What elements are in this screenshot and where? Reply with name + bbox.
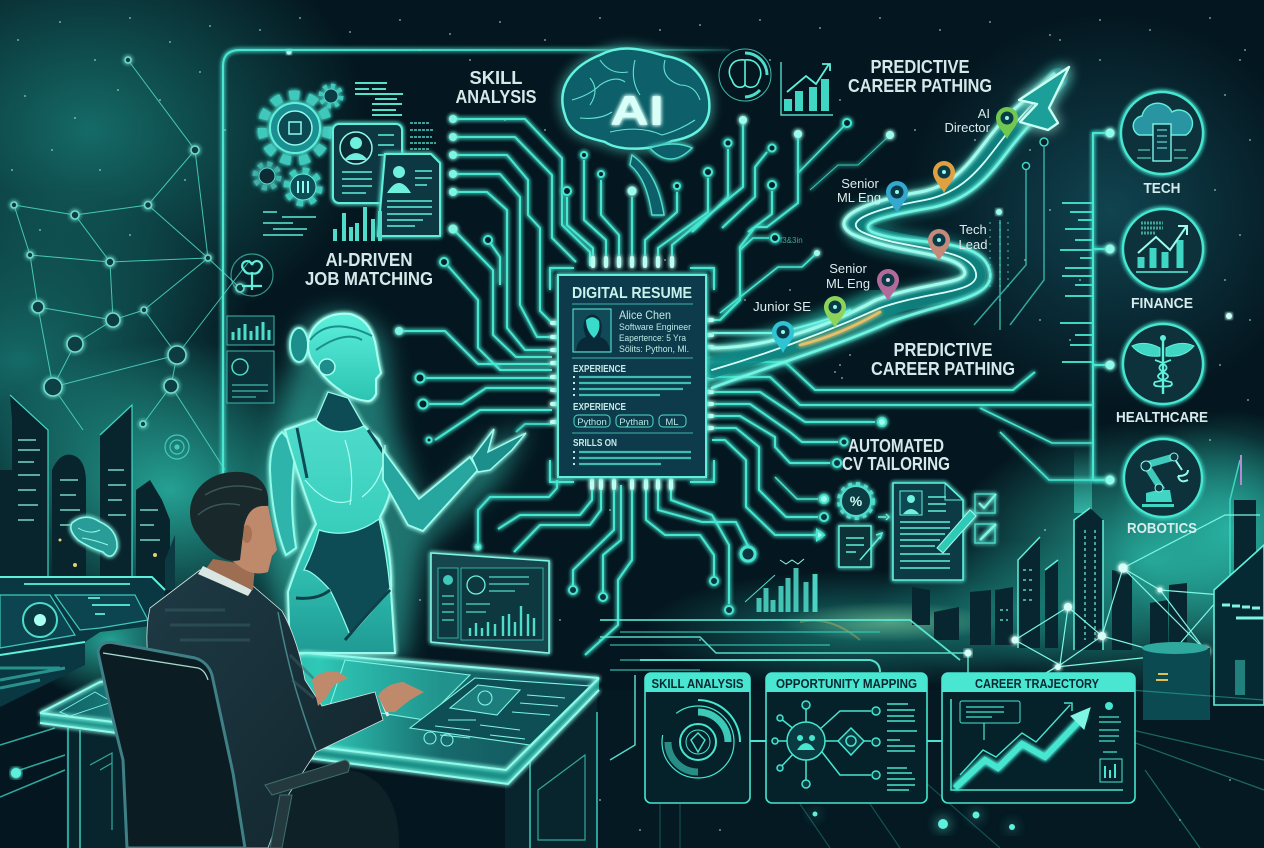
profile photo bbox=[573, 309, 611, 352]
career pins and labels: ML Eng bbox=[837, 190, 881, 205]
woman hologram bbox=[270, 314, 526, 653]
network constellation, left bbox=[11, 57, 250, 470]
skill analysis heading: SKILL bbox=[470, 68, 523, 88]
career pins and labels: ML Eng bbox=[826, 276, 870, 291]
profile text: Software Engineer bbox=[619, 322, 691, 333]
rooftop building, right bbox=[1142, 545, 1264, 720]
digital resume panel bbox=[550, 268, 714, 482]
woman glow halo bbox=[262, 312, 530, 660]
small left panels: bar chart and document bbox=[227, 316, 274, 403]
skill pills: Python bbox=[577, 417, 607, 428]
skill analysis heading: ANALYSIS bbox=[456, 87, 536, 107]
brain with AI label bbox=[562, 49, 709, 215]
career pins and labels: Junior SE bbox=[753, 299, 811, 314]
small garbled readout: f3&3in bbox=[780, 236, 803, 245]
predictive career pathing heading, lower bbox=[871, 340, 1015, 379]
floor grid lines bbox=[600, 620, 1264, 848]
panel: skill analysis bbox=[645, 673, 750, 803]
panel connectors bbox=[750, 740, 942, 742]
hologram arm, left side bbox=[270, 432, 296, 555]
predictive career pathing heading, top bbox=[848, 57, 992, 96]
radial gauge bbox=[662, 700, 740, 778]
cv tailoring icons bbox=[839, 483, 996, 580]
predictive career pathing heading, lower: PREDICTIVE bbox=[894, 340, 992, 360]
caduceus icon bbox=[1132, 335, 1194, 394]
hologram neck bbox=[316, 392, 364, 432]
man seated at desk bbox=[98, 472, 424, 848]
circuit traces: brain to resume top bbox=[563, 116, 894, 320]
digital resume panel: SRILLS ON bbox=[573, 438, 617, 449]
icon: hologram brain, left bbox=[71, 517, 117, 556]
automated cv tailoring heading bbox=[842, 436, 950, 474]
profile text bbox=[619, 308, 691, 355]
job matching heading: AI-DRIVEN bbox=[326, 250, 412, 270]
jacket bbox=[147, 570, 383, 848]
man hair bbox=[190, 472, 268, 561]
career pins and labels: Senior bbox=[829, 261, 867, 276]
career pins and labels: AI bbox=[978, 106, 990, 121]
hologram right arm and hand bbox=[383, 450, 478, 531]
city skyline, left bbox=[0, 395, 180, 600]
target icon bbox=[165, 435, 189, 459]
bottom glowing dots bbox=[812, 812, 1015, 830]
industry: tech bbox=[1121, 92, 1203, 197]
left console bbox=[0, 577, 165, 797]
profile text: Sölits: Python, Ml. bbox=[619, 344, 689, 355]
profile text: Alice Chen bbox=[619, 308, 671, 322]
panel: career trajectory bbox=[942, 673, 1135, 803]
chart icon bbox=[1136, 223, 1188, 272]
predictive career pathing heading, top: PREDICTIVE bbox=[870, 57, 970, 77]
resume document icons bbox=[333, 124, 440, 236]
skill pills bbox=[574, 415, 686, 428]
industry: tech: TECH bbox=[1144, 180, 1180, 197]
automated cv tailoring heading: AUTOMATED bbox=[848, 436, 944, 456]
career pins and labels: Tech bbox=[959, 222, 987, 237]
cv tailoring icons: % bbox=[850, 493, 863, 509]
cloud and server icon bbox=[1133, 103, 1192, 161]
industry: finance: FINANCE bbox=[1131, 295, 1193, 312]
man neck and collar bbox=[205, 559, 255, 590]
career path ribbon and arrow bbox=[700, 67, 1069, 388]
career pins and labels: Senior bbox=[841, 176, 879, 191]
code readouts and small bars bbox=[263, 83, 436, 241]
robot arm icon bbox=[1141, 453, 1188, 507]
resume title: DIGITAL RESUME bbox=[572, 285, 692, 302]
circuit traces: resume right and lower right bbox=[646, 320, 1104, 614]
small data ticks right of path bbox=[974, 138, 1092, 362]
small bar chart near city bbox=[745, 559, 815, 612]
top right icons: brain badge and chart bbox=[719, 49, 833, 115]
job matching heading bbox=[305, 250, 433, 289]
floor node bbox=[964, 650, 972, 656]
man hands bbox=[312, 672, 348, 706]
hologram torso and skirt bbox=[285, 419, 395, 653]
network over city bbox=[1000, 515, 1260, 700]
man face bbox=[232, 505, 277, 574]
predictive career pathing heading, top: CAREER PATHING bbox=[848, 76, 992, 96]
desk bbox=[40, 653, 599, 848]
AI label: AI bbox=[610, 87, 664, 134]
circuit traces: resume bottom bbox=[476, 480, 671, 655]
skill pills: ML bbox=[665, 417, 679, 428]
night city, lower right bbox=[800, 447, 1256, 655]
panel: skill analysis: SKILL ANALYSIS bbox=[652, 677, 744, 691]
career pins and labels: Director bbox=[944, 120, 991, 135]
panel: opportunity mapping bbox=[766, 673, 927, 803]
icon: tree node in circle bbox=[231, 254, 273, 296]
panel: career trajectory: CAREER TRAJECTORY bbox=[975, 677, 1100, 691]
circuit traces: upper left and left side bbox=[395, 115, 590, 442]
industry: robotics bbox=[1124, 439, 1202, 537]
job matching heading: JOB MATCHING bbox=[305, 269, 433, 289]
industry: robotics: ROBOTICS bbox=[1127, 520, 1197, 537]
digital resume panel: EXPERIENCE bbox=[573, 364, 626, 375]
industry: healthcare bbox=[1116, 324, 1208, 426]
industry: healthcare: HEALTHCARE bbox=[1116, 409, 1208, 426]
industry connector line bbox=[1093, 128, 1114, 484]
hologram head bbox=[308, 314, 381, 401]
opportunity network bbox=[772, 701, 880, 788]
waist corset bbox=[304, 519, 390, 635]
panel: opportunity mapping: OPPORTUNITY MAPPING bbox=[776, 677, 917, 691]
skill pills: Pythan bbox=[619, 417, 649, 428]
gears icon group bbox=[255, 86, 341, 203]
digital resume panel: EXPERIENCE bbox=[573, 402, 626, 413]
desk screens bbox=[60, 660, 590, 746]
mini dashboard monitor bbox=[431, 553, 549, 653]
shoulder bands bbox=[297, 428, 385, 478]
career pins and labels bbox=[753, 106, 1018, 353]
predictive career pathing heading, lower: CAREER PATHING bbox=[871, 359, 1015, 379]
skill analysis heading bbox=[456, 68, 536, 107]
career pins and labels: Lead bbox=[959, 237, 987, 252]
trajectory chart bbox=[951, 699, 1123, 790]
office chair bbox=[98, 642, 245, 848]
pants bbox=[255, 770, 399, 848]
frame line around analysis area bbox=[223, 50, 730, 500]
automated cv tailoring heading: CV TAILORING bbox=[842, 454, 950, 474]
profile text: Eapertence: 5 Yra bbox=[619, 333, 687, 344]
industry: finance bbox=[1123, 209, 1203, 312]
